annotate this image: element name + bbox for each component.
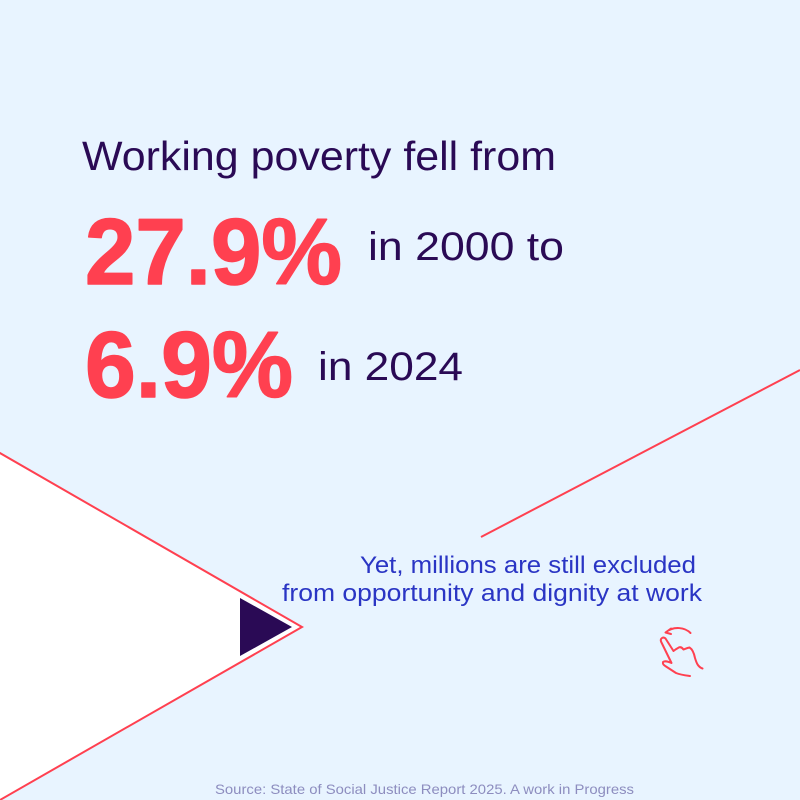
icon: dark play triangle: [240, 598, 292, 656]
label: in 2000 to: in 2000 to: [368, 225, 564, 269]
icon: swipe hand: [661, 628, 702, 676]
callout text: from opportunity and dignity at work: [282, 580, 703, 607]
source note: Source: State of Social Justice Report 2025. A work in Progress: [215, 781, 634, 797]
callout text: [282, 552, 703, 607]
heading: Working poverty fell from: [82, 133, 556, 179]
callout text: Yet, millions are still excluded: [360, 552, 696, 579]
diagonal accent line: [481, 370, 800, 537]
stat: 27.9%: 27.9%: [85, 199, 342, 304]
white arrow panel: [0, 447, 302, 800]
stat: 6.9%: 6.9%: [85, 312, 293, 417]
label: in 2024: in 2024: [318, 345, 463, 389]
